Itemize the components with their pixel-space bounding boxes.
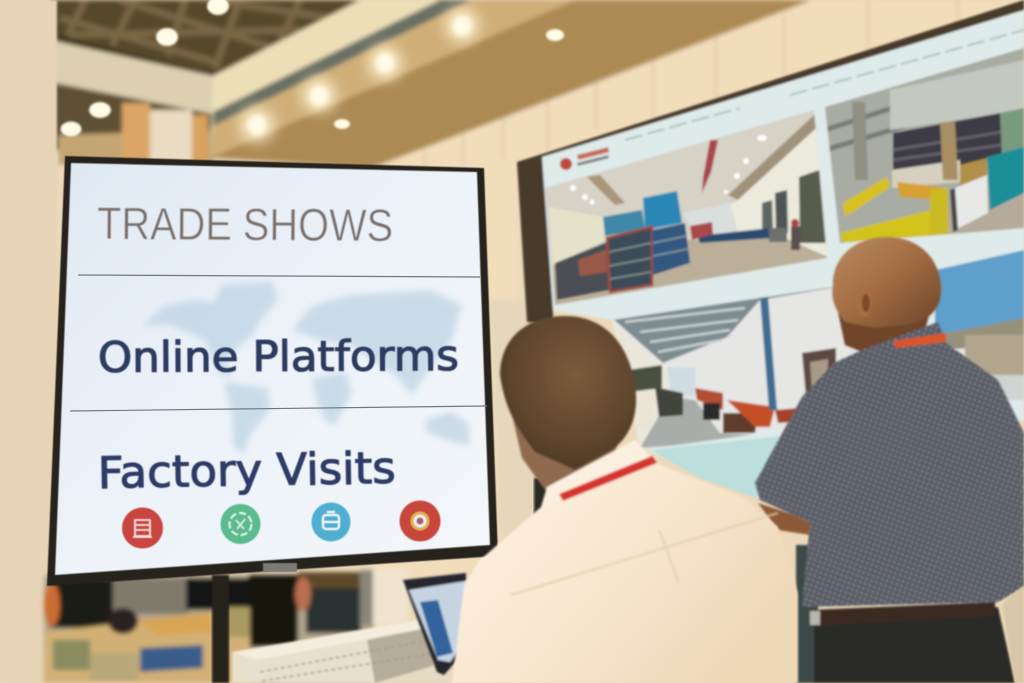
shadowed gap beside monitor (534, 478, 552, 515)
trousers (814, 607, 1015, 683)
teal lower strip (650, 435, 790, 498)
neck (512, 415, 620, 505)
back display wall (517, 0, 1024, 498)
booth table with products (44, 607, 250, 683)
icon: red badge (400, 500, 440, 542)
monitor bezel (47, 156, 498, 586)
shirt body (452, 440, 798, 683)
hair (500, 316, 636, 470)
booth wall right edge (1002, 585, 1024, 683)
wall strip behind monitor (490, 300, 550, 560)
factory photo one (540, 105, 835, 310)
display logo (560, 147, 609, 170)
heading: trade shows: TRADE SHOWS (97, 198, 393, 251)
crowd silhouettes (44, 570, 373, 647)
belt (810, 602, 995, 626)
shirt (755, 322, 1024, 607)
world map watermark (143, 282, 470, 455)
neck and jaw (838, 312, 930, 352)
white counter (232, 620, 470, 683)
foreground crowd and tables (44, 570, 408, 683)
man in grey shirt (755, 237, 1024, 683)
head (832, 237, 941, 328)
icon: red document (122, 508, 163, 548)
divider lines (70, 275, 487, 411)
monitor stand (212, 575, 229, 683)
ceiling lights (60, 0, 564, 142)
man in white shirt (452, 316, 798, 683)
background legs (796, 545, 818, 683)
ceiling truss (50, 0, 360, 78)
monitor screen (55, 163, 490, 575)
ear (856, 287, 872, 317)
collar (541, 440, 656, 507)
lanyard (893, 333, 946, 348)
laptop (403, 573, 466, 675)
light wall band (50, 40, 213, 114)
icon: blue factory (312, 502, 350, 542)
cream wall panels (372, 0, 1024, 600)
label: factory visits: Factory Visits (97, 443, 396, 499)
pillar (0, 0, 57, 683)
lower truss and columns (50, 82, 213, 165)
monitor control strip (263, 563, 297, 572)
factory photo three (614, 286, 838, 450)
foreground monitor (47, 156, 498, 586)
display surface (542, 10, 1024, 498)
ceiling underside (210, 0, 812, 168)
label: online platforms: Online Platforms (98, 331, 459, 382)
icon: green recycle (220, 504, 260, 544)
forearm (758, 503, 810, 535)
lanyard (559, 456, 657, 501)
factory photo two (820, 45, 1024, 250)
shirt creases (511, 513, 778, 595)
factory photo four (930, 245, 1024, 405)
display frame (517, 0, 1024, 325)
upper beam (210, 0, 575, 158)
